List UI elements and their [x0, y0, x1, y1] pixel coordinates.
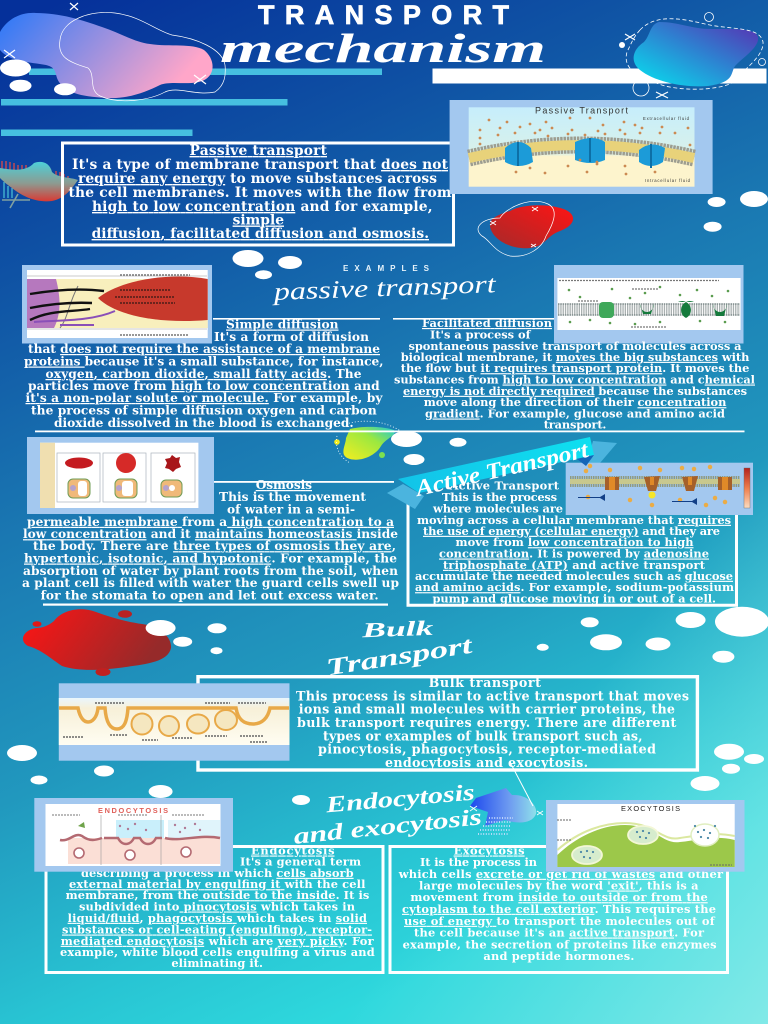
text: endocytosis description: describing a process in which cells absorb	[81, 866, 354, 880]
text: exocytosis description: movement from inside to outside or from the	[410, 890, 708, 904]
text: active transport description: pump and glucose moving in or out of a cell.	[432, 592, 716, 606]
text block: osmosis: a plant cell is filled with water the guard cells swell up	[22, 576, 399, 590]
text block: simple diffusion: that does not require the assistance of a membrane	[28, 342, 380, 356]
text block: simple diffusion: the process of simple diffusion oxygen and carbon	[31, 404, 377, 418]
panel: passive transport	[62, 143, 454, 245]
text: endocytosis description	[60, 854, 375, 970]
heading: examples: EXAMPLES	[343, 264, 430, 273]
image: osmosis diagram	[27, 437, 214, 514]
blob: cyan purple top-right	[619, 12, 766, 98]
text: bulk transport description: types or examples of bulk transport such as,	[323, 728, 643, 744]
image: facilitated diffusion diagram	[554, 265, 744, 344]
text block: osmosis: hypertonic, isotonic, and hypotonic. For example, the	[24, 552, 397, 566]
text: bulk transport description: ions and small molecules with carrier proteins, the	[299, 702, 675, 716]
panel: exocytosis	[390, 844, 728, 972]
text block: osmosis: for the stomata to open and let out excess water.	[41, 588, 379, 602]
image: passive transport membrane diagram	[450, 100, 713, 194]
blob: lime accent	[334, 421, 402, 463]
text: exocytosis description: example, the secretion of proteins like enzymes	[403, 938, 717, 952]
text: endocytosis description: It's a general term	[240, 854, 361, 868]
heading: endocytosis and exocytosis script	[292, 780, 483, 849]
text: bulk transport description: This process is similar to active transport that moves	[296, 688, 689, 704]
text: endocytosis description: membrane, from the outside to the inside. It is	[66, 888, 369, 902]
text block: simple diffusion	[24, 318, 384, 430]
text block: osmosis: low concentration and it maintains homeostasis inside	[23, 527, 398, 541]
text block: facilitated diffusion: move along the direction of their concentration	[424, 395, 727, 409]
heading: endocytosis and exocytosis script: and exocytosis	[292, 804, 483, 849]
text: endocytosis description: example, white blood cells engulfing a virus and	[60, 945, 375, 959]
text: bulk transport description: bulk transport requires energy. There are different	[297, 715, 677, 730]
image: passive transport membrane diagram: Extracellular fluid	[643, 116, 690, 121]
text: passive transport description: the cell membranes. It moves with the flow from	[68, 185, 452, 201]
image: bulk transport endocytosis diagram	[59, 683, 289, 761]
text block: osmosis: permeable membrane from a high concentration to a	[27, 515, 394, 529]
text block: facilitated diffusion: spontaneous passive transport of molecules across a	[408, 339, 742, 353]
image: exocytosis diagram	[546, 800, 744, 872]
text block: osmosis: of water in a semi-	[227, 502, 355, 516]
text: exocytosis description	[398, 855, 724, 963]
text: passive transport description: diffusion, facilitated diffusion and osmosis.	[92, 226, 429, 242]
heading: simple diffusion: Simple diffusion	[226, 318, 339, 332]
text: bulk transport description	[296, 688, 689, 770]
text block: simple diffusion: It's a form of diffusion	[214, 330, 369, 344]
text block: facilitated diffusion: substances from high to low concentration and chemical	[394, 372, 756, 386]
text block: simple diffusion: dioxide dissolved in the blood is exchanged.	[54, 416, 354, 430]
text: exocytosis description: and peptide hormones.	[483, 949, 634, 963]
text: endocytosis description: external material by engulfing it with the cell	[69, 877, 366, 891]
heading: endocytosis: Endocytosis	[251, 844, 334, 858]
heading: bulk transport: Bulk transport	[429, 675, 541, 690]
text: endocytosis description: liquid/fluid, phagocytosis which takes in solid	[68, 911, 367, 925]
heading: passive transport script: passive transport	[271, 271, 497, 306]
image: simple diffusion diagram	[22, 265, 212, 344]
text block: facilitated diffusion: transport.	[544, 418, 606, 432]
text: bulk transport description: pinocytosis, phagocytosis, receptor-mediated	[318, 742, 656, 756]
text: endocytosis description: eliminating it.	[171, 956, 263, 970]
white bubbles	[0, 60, 768, 805]
text block: facilitated diffusion: It's a process of	[430, 328, 532, 342]
ribbon: active transport banner: Active Transport	[411, 437, 591, 502]
heading: bulk transport script	[324, 616, 476, 681]
text block: osmosis	[22, 478, 399, 606]
text block: facilitated diffusion: the flow but it requires transport protein. It moves the	[401, 361, 749, 375]
text: active transport description: and amino acids. For example, sodium-potassium	[415, 580, 734, 594]
text: active transport description: triphosphate (ATP) and active transport	[443, 558, 706, 572]
heading: passive transport: Passive transport	[190, 143, 328, 159]
text: active transport description	[415, 490, 734, 606]
divider line: middle	[35, 430, 744, 432]
image: passive transport membrane diagram: Intracellular fluid	[645, 178, 691, 183]
blob: blue star near endocytosis	[470, 762, 543, 834]
heading: osmosis: Osmosis	[256, 478, 312, 492]
text: exocytosis description: use of energy to transport the molecules out of	[404, 914, 716, 928]
text: active transport description: concentration. It is powered by adenosine	[439, 546, 709, 560]
text: exocytosis description: the cell because it's an active transport. For	[414, 926, 705, 940]
text: exocytosis description: cytoplasm to the cell exterior. This requires the	[402, 902, 716, 916]
text block: osmosis: absorption of water by plant roots from the soil, when	[23, 564, 398, 578]
blob: red lower-left	[23, 609, 171, 676]
text: bulk transport description: endocytosis and exocytosis.	[385, 755, 588, 770]
text: exocytosis description: which cells excrete or get rid of wastes and other	[398, 867, 724, 881]
heading: endocytosis and exocytosis script: Endocytosis	[324, 780, 476, 818]
text: exocytosis description: It is the process in	[420, 855, 538, 869]
blob: fish shape left edge	[0, 161, 78, 208]
text block: osmosis: the body. There are three types of osmosis they are,	[33, 539, 396, 553]
text block: simple diffusion: oxygen, carbon dioxide, small fatty acids. The	[46, 367, 362, 381]
image: endocytosis diagram: ENDOCYTOSIS	[98, 806, 168, 815]
image: endocytosis diagram	[34, 798, 233, 872]
heading: bulk transport script: Transport	[324, 632, 476, 681]
text block: facilitated diffusion: energy is not directly required because the substances	[403, 384, 747, 398]
text: active transport description: moving across a cellular membrane that requires	[417, 513, 731, 527]
heading: bulk transport script: Bulk	[360, 616, 434, 642]
title: mechanism: mechanism	[220, 25, 546, 71]
image: exocytosis diagram: EXOCYTOSIS	[621, 804, 680, 813]
text: passive transport description: It's a type of membrane transport that does not	[72, 157, 449, 173]
text: active transport description: This is the process	[442, 490, 557, 504]
text block: simple diffusion: proteins because it's a small substance, for instance,	[24, 354, 384, 368]
heading: facilitated diffusion: Facilitated diffusion	[422, 316, 553, 330]
text: passive transport description: require any energy to move substances across	[78, 171, 437, 187]
text: endocytosis description: substances or cell-eating (engulfing), receptor-	[62, 922, 372, 936]
blob: pink top-left	[0, 3, 225, 101]
text: endocytosis description: mediated endocytosis which are very picky. For	[61, 934, 375, 948]
panel: bulk transport	[198, 675, 697, 770]
text block: facilitated diffusion	[393, 316, 756, 432]
text block: facilitated diffusion: biological membrane, it moves the big substances with	[401, 350, 750, 364]
panel: endocytosis	[46, 844, 383, 972]
text: passive transport description: high to low concentration and for example,	[92, 199, 432, 215]
ribbon: active transport tail	[387, 441, 617, 509]
heading: exocytosis: Exocytosis	[454, 844, 525, 858]
image: passive transport membrane diagram: Passive Transport	[535, 106, 628, 116]
text: active transport description: accumulate the needed molecules such as glucose	[415, 569, 733, 583]
title: TRANSPORT: TRANSPORT	[258, 0, 510, 30]
text block: simple diffusion: particles move from high to low concentration and	[28, 379, 380, 393]
panel: active transport	[408, 478, 736, 606]
text: active transport description: move from low concentration to high	[456, 535, 694, 549]
image: active transport pump diagram	[566, 463, 753, 515]
text: active transport description: the use of energy (cellular energy) and they are	[423, 524, 720, 538]
text block: facilitated diffusion: gradient. For example, glucose and amino acid	[425, 406, 725, 420]
decorative header bars	[1, 68, 766, 136]
text: passive transport description	[68, 157, 452, 242]
text: exocytosis description: large molecules by the word 'exit', this is a	[419, 878, 699, 892]
text: passive transport description: simple	[233, 212, 284, 228]
text block: simple diffusion: it's a non-polar solute or molecule. For example, by	[26, 391, 383, 405]
heading: active transport: Active Transport	[449, 478, 560, 492]
text: endocytosis description: subdivided into pinocytosis which takes in	[79, 900, 356, 914]
text: active transport description: where molecules are	[432, 502, 563, 516]
text block: osmosis: This is the movement	[219, 490, 366, 504]
blob: red near passive transport	[478, 201, 573, 256]
